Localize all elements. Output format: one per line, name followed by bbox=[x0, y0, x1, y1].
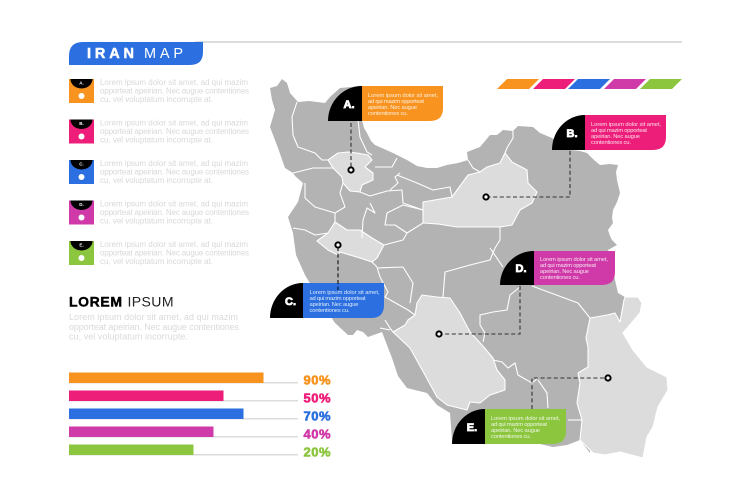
list item E bbox=[69, 240, 249, 266]
list item E: E. bbox=[79, 242, 84, 248]
list item A: opporteat apeirian. Nec augue contentiones bbox=[100, 86, 249, 96]
list item D: cu, vel voluptatum incorrupte at. bbox=[100, 216, 213, 226]
callout A bbox=[328, 86, 443, 121]
bar: 50%: 50% bbox=[304, 390, 331, 406]
list item B: Lorem ipsum dolor sit amet, ad qui mazim bbox=[100, 118, 248, 128]
list item D bbox=[69, 200, 249, 226]
bar: 50% bbox=[69, 390, 331, 406]
callout D: D. bbox=[516, 263, 526, 275]
list item B bbox=[69, 118, 249, 144]
callout E bbox=[452, 409, 566, 444]
pale region: southern province bbox=[393, 295, 505, 410]
bar: 90%: 90% bbox=[304, 372, 331, 388]
callout D: Lorem ipsum dolor sit amet, bbox=[540, 257, 608, 263]
list item E: Lorem ipsum dolor sit amet, ad qui mazim bbox=[100, 240, 248, 249]
callout D: ad qui mazim opporteat bbox=[540, 263, 596, 269]
callout C: apeirian. Nec augue bbox=[310, 302, 358, 308]
colour strip legend bbox=[497, 79, 682, 89]
callout C: ad qui mazim opporteat bbox=[310, 296, 366, 302]
bar: 70%: 70% bbox=[304, 408, 331, 424]
map silhouette bbox=[270, 79, 625, 453]
callout A: contentiones cu. bbox=[368, 111, 408, 117]
callout B: ad qui mazim opporteat bbox=[591, 128, 647, 134]
lorem ipsum body text bbox=[69, 312, 240, 342]
list item E: cu, vel voluptatum incorrupte at. bbox=[100, 257, 213, 266]
callout A: A. bbox=[344, 99, 354, 111]
callout B: B. bbox=[566, 128, 578, 140]
pale region: western province bbox=[317, 222, 384, 262]
callout B: Lorem ipsum dolor sit amet, bbox=[591, 122, 661, 128]
callout D bbox=[500, 251, 615, 285]
leader line C bbox=[335, 242, 341, 290]
callout E: contentiones cu. bbox=[491, 434, 531, 440]
list item D: D. bbox=[79, 202, 84, 207]
callout C bbox=[270, 283, 384, 318]
lorem ipsum body text: cu, vel voluptatum incorrupte. bbox=[69, 332, 188, 342]
bar: 70% bbox=[69, 408, 331, 424]
list item C: opporteat apeirian. Nec augue contentiones bbox=[100, 168, 249, 176]
callout A: Lorem ipsum dolor sit amet, bbox=[368, 93, 438, 99]
list item C bbox=[69, 159, 249, 185]
pale region: northeast province bbox=[423, 153, 537, 227]
lorem ipsum heading: IPSUM bbox=[128, 294, 174, 310]
list item D: opporteat apeirian. Nec augue contentiones bbox=[100, 208, 249, 217]
lorem ipsum body text: Lorem ipsum dolor sit amet, ad qui mazim bbox=[69, 312, 238, 322]
list item C: cu, vel voluptatum incorrupte at. bbox=[100, 176, 213, 185]
list item A: cu, vel voluptatum incorrupte at. bbox=[100, 95, 213, 104]
lorem ipsum body text: opporteat apeirian. Nec augue contentiones bbox=[69, 322, 240, 332]
list item C: C. bbox=[79, 162, 84, 166]
title banner: MAP bbox=[144, 46, 183, 62]
bar: 90% bbox=[69, 372, 331, 388]
leader line B bbox=[483, 151, 570, 200]
callout A: ad qui mazim opporteat bbox=[368, 99, 424, 105]
callout B bbox=[552, 115, 666, 150]
callout C: C. bbox=[285, 296, 296, 308]
map of Iran bbox=[270, 79, 668, 458]
list item B: cu, vel voluptatum incorrupte at. bbox=[100, 136, 213, 144]
lorem ipsum heading bbox=[69, 294, 174, 310]
bar chart bbox=[69, 372, 331, 460]
list item A: Lorem ipsum dolor sit amet, ad qui mazim bbox=[100, 78, 248, 87]
list item B: opporteat apeirian. Nec augue contentiones bbox=[100, 127, 249, 136]
title banner bbox=[69, 42, 203, 65]
bar: 40% bbox=[69, 426, 331, 442]
bar: 40%: 40% bbox=[304, 426, 331, 442]
list item C: Lorem ipsum dolor sit amet, ad qui mazim bbox=[100, 159, 248, 168]
callout B: contentiones cu. bbox=[591, 140, 631, 146]
callout D: apeirian. Nec augue bbox=[540, 269, 589, 275]
callout E: apeirian. Nec augue bbox=[491, 428, 540, 434]
leader line D bbox=[436, 286, 520, 337]
pale region: southeast province bbox=[577, 297, 668, 458]
leader line A bbox=[348, 123, 354, 173]
list item B: B. bbox=[79, 121, 84, 126]
callout E: Lorem ipsum dolor sit amet, bbox=[491, 416, 560, 422]
callout E: E. bbox=[467, 422, 477, 434]
list item A: A. bbox=[79, 80, 84, 86]
callout C: Lorem ipsum dolor sit amet, bbox=[310, 290, 380, 296]
pale region: northwest province bbox=[328, 152, 373, 192]
bar: 20%: 20% bbox=[304, 444, 331, 460]
list item E: opporteat apeirian. Nec augue contentiones bbox=[100, 248, 249, 258]
list item D: Lorem ipsum dolor sit amet, ad qui mazim bbox=[100, 200, 248, 208]
callout A: apeirian. Nec augue bbox=[368, 105, 417, 111]
callout E: ad qui mazim opporteat bbox=[491, 422, 547, 428]
callout D: contentiones cu. bbox=[540, 275, 580, 281]
title banner: IRAN bbox=[87, 46, 134, 62]
bar: 20% bbox=[69, 444, 331, 460]
leader line E bbox=[532, 375, 611, 409]
lorem ipsum heading: LOREM bbox=[69, 294, 122, 310]
callout C: contentiones cu. bbox=[310, 308, 350, 314]
callout B: apeirian. Nec augue bbox=[591, 134, 640, 140]
list item A bbox=[69, 78, 249, 104]
